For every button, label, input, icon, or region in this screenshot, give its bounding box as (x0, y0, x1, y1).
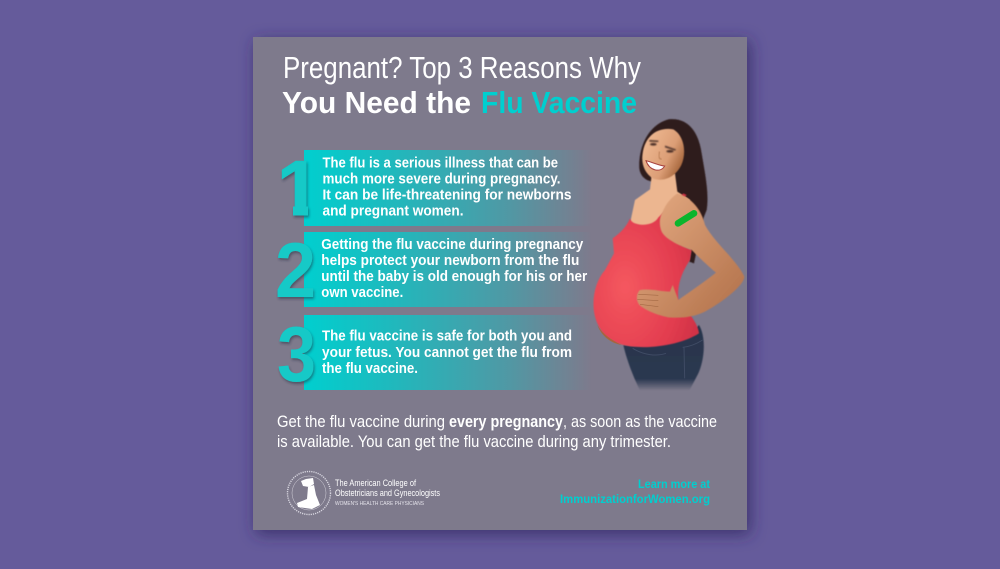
reason 2 text: own vaccine. (321, 285, 403, 301)
panel: card background (253, 37, 747, 530)
logo: ACOG seal (288, 472, 330, 514)
reason 2 (275, 226, 592, 314)
reason 1 banner (304, 150, 592, 226)
reason 2 text: until the baby is old enough for his or her (321, 269, 588, 285)
illustration: pregnant woman with bandage (593, 119, 744, 391)
reason 1 text: It can be life-threatening for newborns (322, 188, 572, 204)
belly skin (597, 325, 622, 345)
reason 2 numeral: 2 (275, 226, 316, 314)
organization name: Obstetricians and Gynecologists (335, 488, 440, 499)
reason 3 text: The flu vaccine is safe for both you and (322, 329, 572, 345)
face (642, 129, 684, 180)
body text: , as soon as the vaccine (563, 412, 717, 431)
hair (639, 119, 707, 263)
reason 2 banner (304, 232, 592, 307)
reason 1 text: The flu is a serious illness that can be (322, 156, 558, 172)
reason 3 banner (304, 315, 592, 390)
finger lines (637, 294, 658, 307)
title: You Need the (282, 85, 471, 120)
torso skin (630, 173, 690, 242)
reason 3 text (322, 329, 572, 377)
shirt (593, 190, 699, 347)
reason 1 (282, 150, 577, 226)
learn more link text: ImmunizationforWomen.org (560, 494, 710, 506)
reason 2 text: Getting the flu vaccine during pregnancy (321, 237, 583, 253)
reason 1 text: much more severe during pregnancy. (322, 172, 560, 188)
learn more link text (560, 479, 710, 506)
bandage (678, 213, 694, 223)
reason 1 numeral: 1 (277, 144, 320, 232)
body text: is available. You can get the flu vaccine during any trimester. (277, 432, 671, 451)
learn more link text: Learn more at (638, 479, 710, 491)
organization name: The American College of (335, 478, 416, 489)
reason 3 numeral: 3 (277, 310, 316, 398)
reason 2 text: helps protect your newborn from the flu (321, 253, 579, 269)
organization name (335, 478, 440, 507)
title: Pregnant? Top 3 Reasons Why (283, 50, 641, 85)
arm and hand (637, 193, 744, 318)
reason 1 text: and pregnant women. (322, 204, 464, 220)
body text (277, 412, 717, 451)
infographic (246, 32, 760, 544)
reason 3 text: the flu vaccine. (322, 361, 418, 377)
title (282, 50, 641, 120)
title: Flu Vaccine (481, 85, 637, 120)
reason 3 text: your fetus. You cannot get the flu from (322, 345, 572, 361)
organization name: WOMEN'S HEALTH CARE PHYSICIANS (335, 501, 424, 507)
jeans (623, 325, 704, 391)
reason 3 (277, 310, 592, 398)
body text: every pregnancy (449, 412, 563, 431)
body text: Get the flu vaccine during (277, 412, 445, 431)
reason 2 text (321, 237, 588, 301)
jeans pocket seams (633, 340, 703, 378)
smile (646, 161, 665, 170)
nose shadow (659, 152, 662, 159)
eyes and brows (649, 140, 676, 153)
reason 1 text (322, 156, 572, 220)
